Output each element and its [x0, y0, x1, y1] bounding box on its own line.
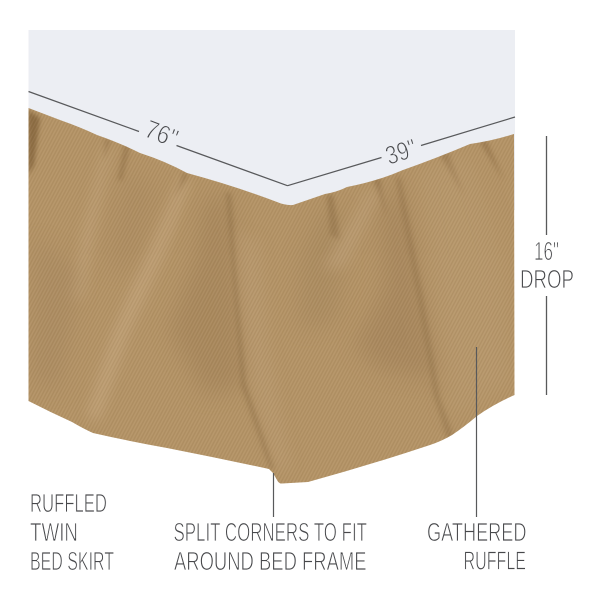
bed sheet: [28, 30, 515, 210]
label: split corners: [174, 517, 367, 576]
leader line: split corner: [272, 473, 274, 517]
label: gathered ruffle: RUFFLE: [464, 546, 526, 576]
label: ruffled twin bed skirt: RUFFLED: [30, 488, 107, 518]
label: split corners: SPLIT CORNERS TO FIT: [174, 517, 367, 547]
light fold 1: [82, 206, 96, 270]
label: gathered ruffle: GATHERED: [427, 517, 526, 547]
label: ruffled twin bed skirt: BED SKIRT: [30, 546, 114, 576]
dimension line: 16 inch drop: [546, 136, 548, 395]
right pleat fold edge: [396, 178, 454, 438]
leader line: gathered ruffle: [476, 347, 478, 517]
right pleat shadow: [366, 208, 427, 370]
fabric weave: [30, 116, 514, 474]
label: split corners: AROUND BED FRAME: [174, 546, 366, 576]
bed skirt fabric: [20, 100, 520, 490]
right panel light: [448, 163, 458, 184]
corner fold light: [236, 230, 292, 470]
second panel shadow: [300, 205, 345, 330]
label: ruffled twin bed skirt: [30, 488, 114, 576]
dimension line: 76 inch: [28, 92, 288, 186]
shadow beside corner fold: [180, 206, 237, 384]
label: 16 inch drop: [520, 236, 574, 294]
left corner shadow: [28, 110, 40, 175]
label: ruffled twin bed skirt: TWIN: [30, 517, 78, 547]
label: 76 inches: 76": [141, 114, 182, 153]
light fold 2: [90, 187, 184, 415]
label: 39 inches: 39": [382, 133, 420, 171]
gathers at top: [104, 138, 504, 240]
corner fold edge: [226, 193, 274, 469]
left panel darker patches: [32, 240, 80, 390]
label: 16 inch drop: 16": [534, 236, 559, 266]
dimension line: 39 inch: [288, 117, 515, 186]
label: 16 inch drop: DROP: [520, 264, 574, 294]
label: gathered ruffle: [427, 517, 526, 576]
second panel light fold: [330, 208, 368, 266]
